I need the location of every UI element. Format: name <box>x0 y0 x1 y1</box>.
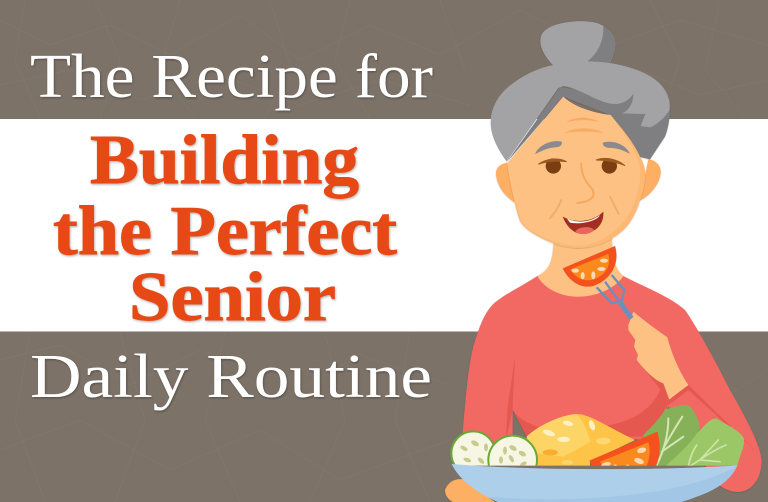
heading line: Daily Routine: Daily Routine <box>30 343 432 411</box>
heading line: Senior: Senior <box>129 259 336 336</box>
plate of food <box>451 405 744 502</box>
white band <box>0 119 768 332</box>
tomato on fork <box>563 246 616 287</box>
plate <box>452 464 737 502</box>
face <box>507 97 645 248</box>
illustration: senior woman eating <box>445 21 762 502</box>
mouth <box>563 212 603 234</box>
fork <box>597 275 632 318</box>
neck <box>537 220 623 297</box>
lettuce dark leaf <box>643 405 699 470</box>
nose <box>577 163 594 203</box>
eyebrows <box>535 141 562 154</box>
sweater shading <box>506 357 515 440</box>
eyes <box>546 158 561 174</box>
sweater <box>462 276 762 492</box>
chicken <box>527 414 635 470</box>
lettuce light leaf <box>666 418 744 466</box>
title <box>30 43 433 411</box>
smile lines <box>550 200 561 218</box>
heading line: The Recipe for: The Recipe for <box>30 43 433 111</box>
forehead wrinkles <box>567 118 598 122</box>
hair bun <box>540 21 615 66</box>
hair back layer <box>507 87 670 162</box>
cucumber slice left <box>450 430 494 466</box>
hair front layer <box>491 61 670 162</box>
heading line: Building: Building <box>90 122 359 199</box>
left hand under plate <box>445 479 497 502</box>
head <box>491 21 670 248</box>
hand holding fork <box>628 312 688 399</box>
heading line: the Perfect: the Perfect <box>53 193 397 270</box>
cucumber slice right <box>487 434 538 466</box>
plate tomato <box>589 432 660 466</box>
body and sweater <box>445 220 762 502</box>
ears <box>496 163 515 203</box>
